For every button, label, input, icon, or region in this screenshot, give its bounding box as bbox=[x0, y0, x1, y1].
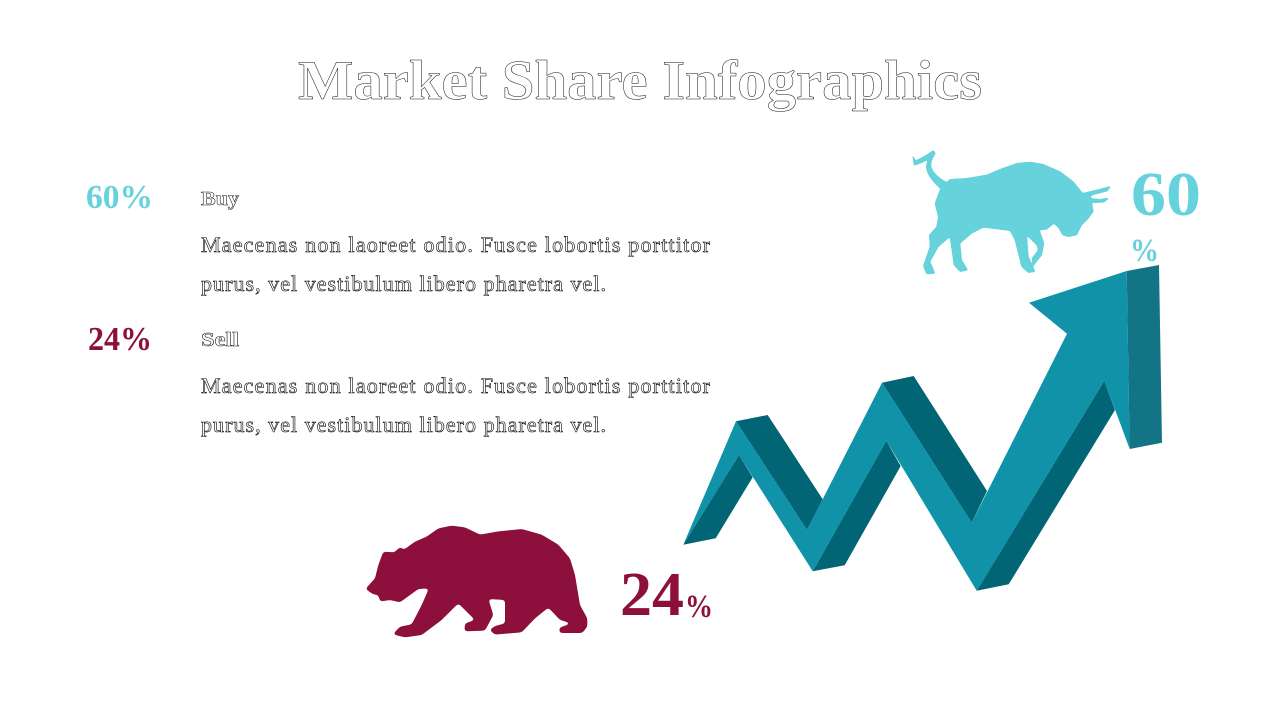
bull value: % bbox=[1130, 233, 1159, 269]
icon: bull bbox=[913, 150, 1111, 274]
bear value: 24 bbox=[620, 561, 684, 629]
sell description: Maecenas non laoreet odio. Fusce lobortis porttitor bbox=[201, 373, 711, 398]
bull value: 60 bbox=[1131, 161, 1201, 229]
sell percentage: 24% bbox=[88, 321, 152, 358]
buy description bbox=[201, 232, 711, 296]
title: Market Share Infographics bbox=[298, 50, 982, 112]
panel: sell bbox=[88, 321, 711, 437]
buy description: Maecenas non laoreet odio. Fusce lobortis porttitor bbox=[201, 232, 711, 257]
sell heading: Sell bbox=[201, 329, 240, 351]
bear value: % bbox=[685, 589, 713, 625]
buy description: purus, vel vestibulum libero pharetra vel. bbox=[201, 271, 606, 296]
icon: bear bbox=[365, 526, 587, 637]
sell description: purus, vel vestibulum libero pharetra vel. bbox=[201, 412, 606, 437]
bear value bbox=[620, 561, 713, 629]
buy percentage: 60% bbox=[86, 179, 153, 216]
buy heading: Buy bbox=[201, 188, 239, 210]
arrow chart bbox=[683, 265, 1162, 591]
sell description bbox=[201, 373, 711, 437]
bull value bbox=[1130, 161, 1201, 269]
panel: buy bbox=[86, 179, 711, 296]
